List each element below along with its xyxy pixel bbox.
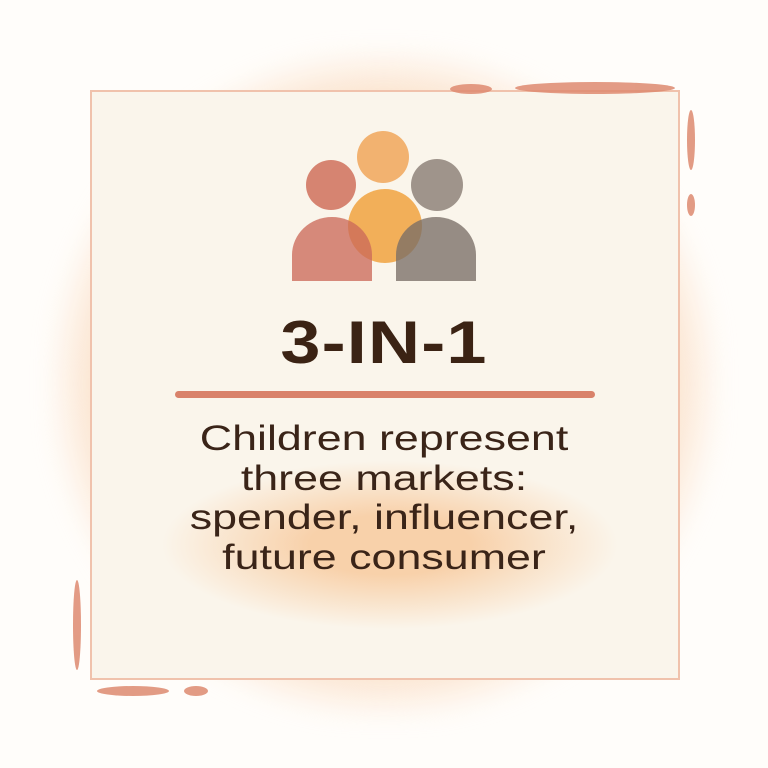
subtitle text [190,419,578,576]
text wash [160,460,620,630]
subtitle text: three markets: [241,458,527,498]
subtitle text: future consumer [222,538,546,576]
icon: group of people [292,131,476,281]
title: 3-IN-1 [280,309,488,376]
panel [90,90,680,680]
divider line [175,391,595,398]
subtitle text: spender, influencer, [190,498,578,537]
background wash [50,50,718,718]
subtitle text: Children represent [200,419,568,458]
